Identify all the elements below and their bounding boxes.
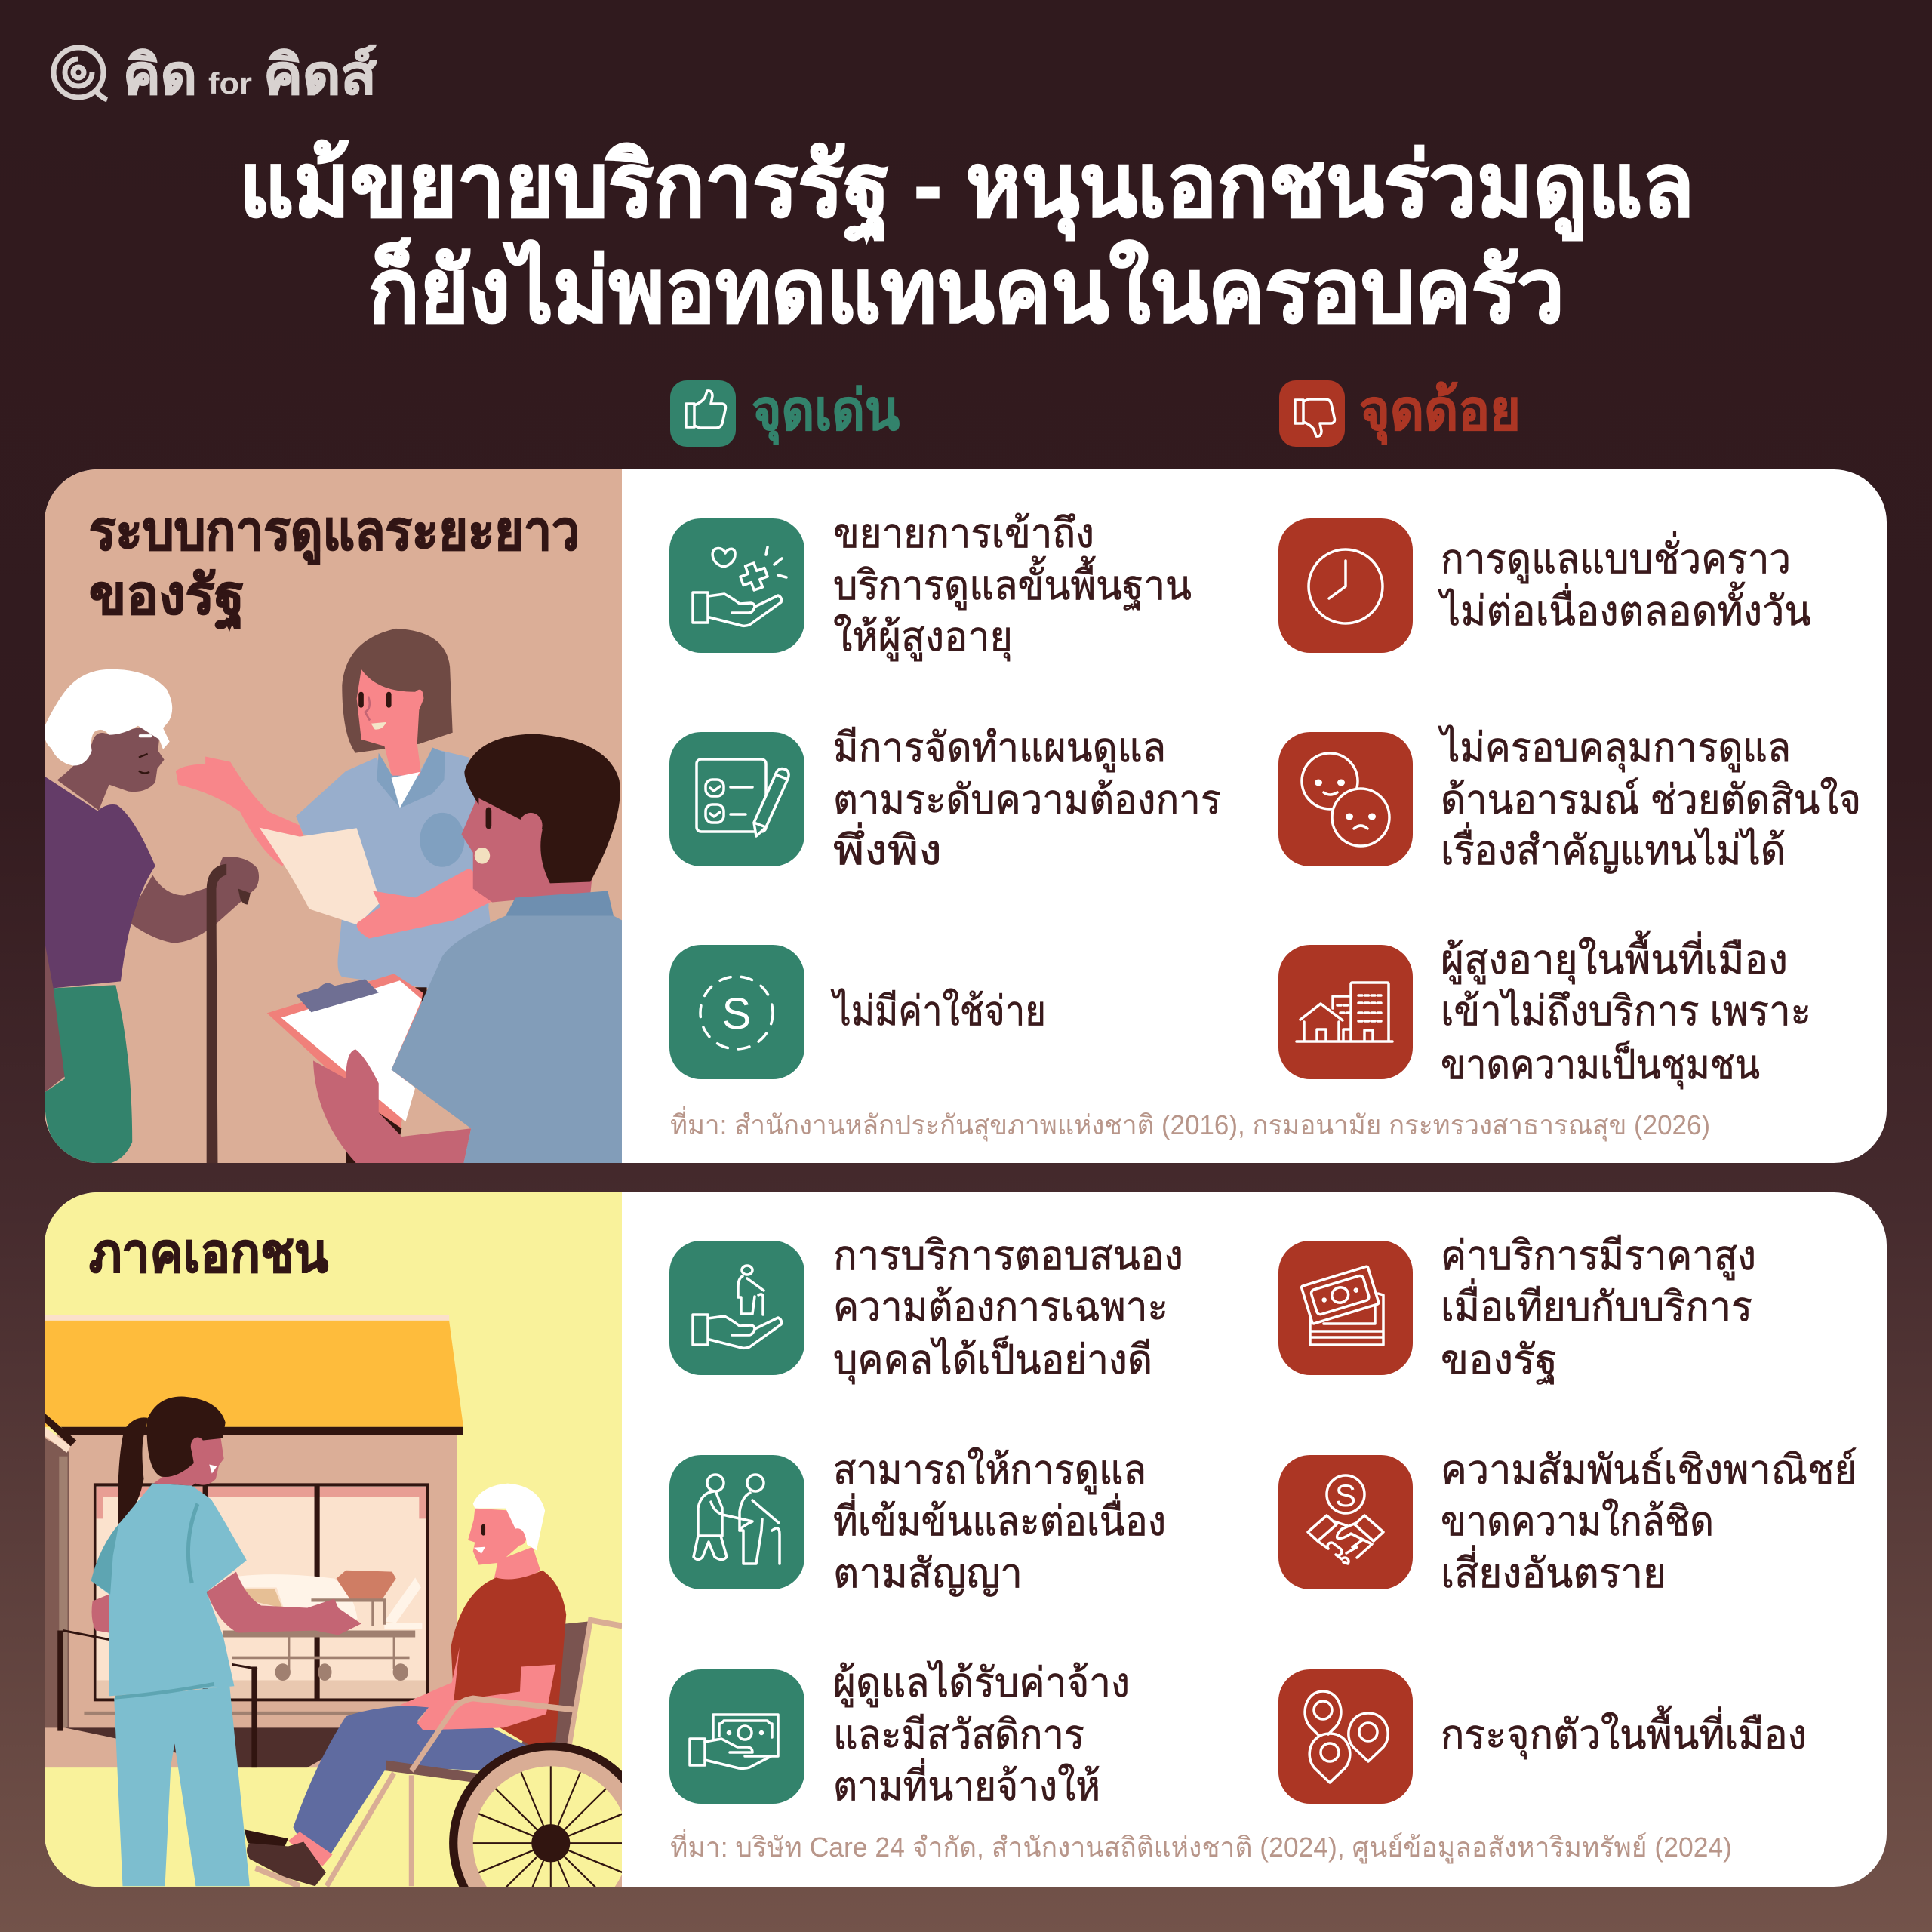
pro item 3: และมีสวัสดิการ: [833, 1712, 1084, 1758]
column header: cons: จุดด้อย: [1359, 379, 1521, 445]
pro item 2: สามารถให้การดูแล: [833, 1447, 1146, 1494]
pro item 2: ตามสัญญา: [833, 1551, 1023, 1596]
con item 3: [1278, 1669, 1807, 1804]
pro item 2: ที่เข้มข้นและต่อเนื่อง: [833, 1493, 1166, 1544]
panel: private sector: [45, 1192, 1887, 1932]
pro item 3: ไม่มีค่าใช้จ่าย: [830, 988, 1046, 1034]
panel heading: ของรัฐ: [89, 565, 245, 630]
icon: checklist and pencil: [697, 759, 789, 836]
pro item 2: [669, 1447, 1166, 1596]
pro item 2: พึ่งพิง: [833, 822, 942, 873]
con item 1: การดูแลแบบชั่วคราว: [1441, 531, 1791, 583]
icon: city buildings: [1297, 983, 1392, 1041]
icon: map pins: [1305, 1691, 1388, 1783]
title: ก็ยังไม่พอทดแทนคนในครอบครัว: [368, 237, 1564, 341]
source note: ที่มา: บริษัท Care 24 จำกัด, สำนักงานสถิติแห่งชาติ (2024), ศูนย์ข้อมูลอสังหาริมทรัพย์ (2024): [670, 1829, 1732, 1864]
logo: คิด: [123, 45, 197, 106]
title: [239, 136, 1694, 341]
pro item 2: มีการจัดทำแผนดูแล: [833, 725, 1166, 772]
illustration: nurse and man in wheelchair at care home: [45, 1192, 622, 1887]
con item 2: ขาดความใกล้ชิด: [1441, 1498, 1714, 1544]
logo: คิดส์: [263, 45, 377, 106]
icon: hand holding banknote: [690, 1715, 778, 1768]
icon: hand holding elderly person: [693, 1266, 782, 1348]
panel: state long-term care: [45, 469, 1887, 1164]
con item 1: ค่าบริการมีราคาสูง: [1441, 1233, 1756, 1280]
con item 1: ไม่ต่อเนื่องตลอดทั้งวัน: [1438, 582, 1811, 634]
column header: cons: [1279, 379, 1521, 447]
con item 1: [1278, 1233, 1756, 1384]
con item 2: ความสัมพันธ์เชิงพาณิชย์: [1441, 1447, 1857, 1493]
con item 2: ไม่ครอบคลุมการดูแล: [1438, 724, 1791, 773]
con item 3: ผู้สูงอายุในพื้นที่เมือง: [1441, 931, 1788, 985]
title: แม้ขยายบริการรัฐ - หนุนเอกชนร่วมดูแล: [239, 136, 1694, 244]
illustration: elderly woman, nurse and carer: [45, 469, 622, 1164]
icon: clock: [1309, 549, 1383, 623]
pro item 1: ขยายการเข้าถึง: [833, 511, 1094, 556]
con item 2: [1278, 1447, 1857, 1596]
pro item 1: ความต้องการเฉพาะ: [833, 1284, 1168, 1330]
con item 2: เสี่ยงอันตราย: [1441, 1545, 1666, 1596]
panel heading: ภาคเอกชน: [89, 1223, 328, 1284]
con item 3: เข้าไม่ถึงบริการ เพราะ: [1441, 988, 1811, 1034]
pro item 1: [669, 511, 1192, 662]
con item 1: [1278, 518, 1811, 653]
column header: pros: จุดเด่น: [752, 379, 900, 445]
con item 2: ด้านอารมณ์ ช่วยตัดสินใจ: [1441, 777, 1861, 823]
pro item 1: การบริการตอบสนอง: [833, 1233, 1183, 1278]
con item 1: ของรัฐ: [1441, 1337, 1558, 1384]
pro item 2: [669, 725, 1221, 873]
icon: stack of banknotes: [1301, 1266, 1383, 1345]
icon: hand with heart and cross: [693, 547, 786, 626]
icon: dashed coin: S: [722, 989, 751, 1038]
pro item 3: [669, 1660, 1130, 1809]
con item 1: เมื่อเทียบกับบริการ: [1441, 1278, 1752, 1330]
column header: pros: [670, 379, 900, 447]
con item 3: กระจุกตัวในพื้นที่เมือง: [1441, 1706, 1807, 1760]
pro item 3: ผู้ดูแลได้รับค่าจ้าง: [833, 1660, 1130, 1707]
con item 3: [1278, 931, 1811, 1090]
icon: handshake with coin: [1308, 1475, 1383, 1564]
icon: dashed coin: [700, 977, 773, 1049]
pro item 1: ให้ผู้สูงอายุ: [833, 614, 1013, 662]
con item 2: [1278, 724, 1861, 873]
logo: for: [208, 67, 252, 100]
logo: [54, 45, 377, 106]
pro item 1: บริการดูแลขั้นพื้นฐาน: [833, 556, 1192, 610]
con item 2: เรื่องสำคัญแทนไม่ได้: [1441, 822, 1786, 873]
panel heading: ระบบการดูแลระยะยาว: [89, 501, 580, 565]
pro item 1: บุคคลได้เป็นอย่างดี: [833, 1336, 1152, 1385]
icon: handshake with coin: S: [1335, 1478, 1356, 1513]
con item 3: ขาดความเป็นชุมชน: [1441, 1041, 1760, 1090]
pro item 1: [669, 1233, 1183, 1385]
pro item 2: ตามระดับความต้องการ: [833, 777, 1221, 823]
panel heading: [89, 501, 580, 630]
icon: carer supporting elder: [694, 1475, 780, 1564]
icon: happy and sad faces: [1302, 753, 1389, 846]
source note: ที่มา: สำนักงานหลักประกันสุขภาพแห่งชาติ (2016), กรมอนามัย กระทรวงสาธารณสุข (2026): [670, 1106, 1710, 1142]
pro item 3: ตามที่นายจ้างให้: [833, 1758, 1100, 1809]
pro item 3: [669, 945, 1046, 1079]
